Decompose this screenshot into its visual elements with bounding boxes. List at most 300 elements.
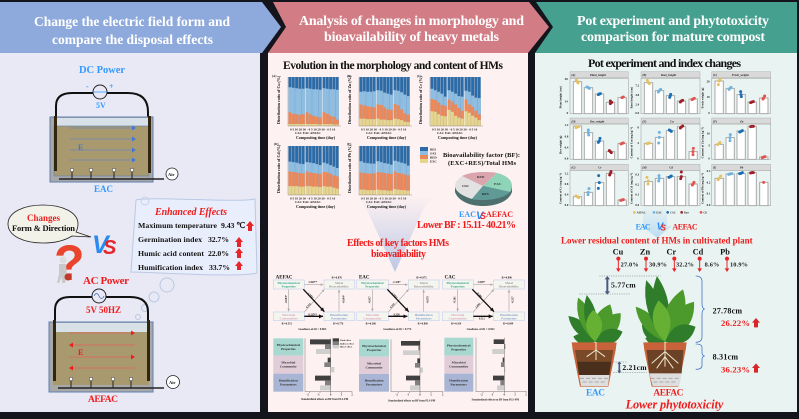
- effects chart: CAC: Microbial: [452, 361, 466, 365]
- comparison: EAC vs AEFAC: V: [657, 221, 665, 232]
- legend: treatments: EAC: [656, 211, 662, 214]
- effects chart: EAC: Physicochemical: [362, 344, 386, 348]
- AC reactor diagram: E: [78, 348, 83, 357]
- path diagram: CAC: -0.537: [512, 296, 515, 303]
- path diagram: CAC: Properties: [451, 285, 465, 289]
- path diagram: EAC: 0.561: [390, 302, 396, 309]
- small chart: dry weight: (D): [571, 119, 575, 123]
- effects chart: CAC: Standardized effects on BF from PLS-PM: [472, 399, 519, 402]
- pie chart: fractions: [455, 172, 512, 206]
- effects chart: EAC: Microbial: [367, 361, 381, 365]
- path diagram: EAC: -1.320*: [392, 281, 401, 284]
- callout: changes speech bubble: Changes: [27, 213, 60, 223]
- small chart: dry weight: 0.0: [565, 157, 569, 161]
- chart C: Cr fractions: (C): [417, 74, 421, 78]
- path diagram: EAC: R²=0.875: [416, 277, 427, 280]
- chart D: Cd fractions: CAC EAC AEFAC: [295, 200, 321, 204]
- small chart: Pb: 0.0: [707, 203, 711, 207]
- stats: shoot and root gains: 8.31cm: [713, 352, 738, 361]
- AC reactor diagram: Air: [169, 380, 176, 385]
- path diagram: CAC: Humification: [500, 313, 518, 317]
- chart C: Cr fractions: Distribution ratio of Cr (%): [418, 76, 423, 124]
- small chart: fresh weight: 20: [707, 79, 710, 83]
- DC reactor diagram: EAC: [94, 184, 113, 194]
- effects chart: AEFAC: Properties: [281, 347, 296, 351]
- pie chart: fractions: EXC: [494, 182, 502, 186]
- small chart: dry weight: 0.4: [565, 146, 569, 150]
- chart D: Cd fractions: Composting time (day): [296, 204, 336, 209]
- effects chart: AEFAC: Community: [280, 365, 297, 369]
- effects chart: AEFAC: 2: [351, 394, 353, 397]
- small chart: Cd: 0.0: [635, 203, 640, 207]
- text: bioavailability factor: [443, 152, 520, 167]
- small chart: plant height: (A): [571, 73, 575, 77]
- pie chart: fractions: RES: [482, 192, 489, 196]
- path diagram: AEFAC: Properties: [282, 285, 296, 289]
- small chart: Zn: Content of Zn (mg kg⁻¹): [700, 127, 704, 158]
- callout: enhanced effects scroll: Germination index: [138, 235, 202, 244]
- path diagram: EAC: -0.879: [426, 296, 429, 303]
- header: electric field form: Change the electric field form and: [34, 14, 230, 29]
- small chart: Cr: [558, 164, 628, 207]
- path diagram: AEFAC: Goodness-of-fit = 0.863: [298, 327, 327, 331]
- path diagram: CAC: 0.112: [479, 317, 485, 320]
- chart D: Cd fractions: (D): [274, 142, 278, 146]
- chart A: Cu fractions: 0 5 10 20 30 · 0 5 10 20 30 · 0 5 10: [290, 128, 336, 132]
- small chart: fresh weight: Fresh_weight: [732, 73, 749, 77]
- effects chart: CAC: Properties: [451, 348, 467, 352]
- text: bioavailability factor: Bioavailability factor (BF):: [443, 152, 520, 159]
- small chart: Cd: 0.1: [635, 193, 640, 197]
- path diagram: AEFAC: Parameters: [331, 317, 348, 321]
- path diagram: CAC: Microbial: [451, 313, 464, 317]
- small chart: Zn: 5: [708, 144, 710, 148]
- heavy metal reductions: [613, 247, 748, 272]
- effects chart: CAC: Physicochemical: [447, 344, 470, 348]
- heading: lower residual content: Lower residual content of HMs in cultivated plant: [561, 235, 753, 245]
- small chart: Pb: 0.1: [707, 192, 711, 196]
- small chart: Cd: (H): [642, 166, 647, 170]
- small chart: dry weight: Dry weight (g): [558, 136, 562, 154]
- icon: VS: [92, 231, 117, 259]
- path diagram: CAC: 2.090*: [478, 281, 486, 284]
- chart D: Cd fractions: 0 5 10 20 30 · 0 5 10 20 30 · 0 5 10: [290, 196, 336, 200]
- small chart: Cr: 0.8: [565, 182, 569, 186]
- effects chart: CAC: Parameters: [450, 383, 468, 387]
- path diagram: CAC: CAC: [445, 275, 456, 280]
- effects chart: CAC: 0: [504, 394, 506, 397]
- small chart: Cd: Content of Cd (mg kg⁻¹): [630, 173, 634, 204]
- pie chart: fractions: OXI: [462, 184, 469, 188]
- small chart: Cr: (G): [571, 166, 575, 170]
- chart D: Cd fractions: Distribution ratio of Cd (%): [276, 144, 281, 193]
- text: bioavailability factor: (EXC+RES)/Total HMs: [448, 160, 516, 167]
- AC reactor diagram: AEFAC: [88, 395, 118, 405]
- panel: pot experiment: [535, 2, 797, 412]
- path diagram: CAC: -0.561: [454, 296, 457, 303]
- small chart: Cd: 0.2: [635, 183, 640, 187]
- path diagram: EAC: Physicochemical: [361, 281, 384, 285]
- effects chart: EAC: Community: [365, 365, 383, 369]
- path diagram: EAC: 1.293*: [391, 292, 398, 300]
- path diagram: EAC: -0.937: [368, 296, 371, 303]
- effects chart: EAC: Humification: [365, 379, 384, 383]
- small chart: Zn: 0: [708, 157, 710, 161]
- stats: shoot and root gains: [713, 306, 760, 375]
- small chart: root height: 4.8: [635, 93, 640, 97]
- dimension: 5.77cm: [579, 276, 661, 295]
- small chart: Zn: 10: [707, 131, 710, 135]
- comparison: EAC vs AEFAC: S: [661, 224, 667, 233]
- callout: enhanced effects scroll: 22.0%: [208, 249, 229, 258]
- path diagram: EAC: Metal: [420, 281, 428, 285]
- heading: pot experiment: Pot experiment and index changes: [588, 56, 741, 70]
- DC reactor diagram: Air: [168, 172, 174, 177]
- effects chart: AEFAC: -2: [307, 394, 310, 397]
- small chart: dry weight: 0.8: [565, 134, 569, 138]
- chart E: Pb fractions: [347, 142, 412, 209]
- heavy metal reductions: Pb: [720, 247, 730, 256]
- header: morphology: bioavailability of heavy metals: [324, 30, 500, 45]
- plant: EAC pot: [564, 294, 627, 387]
- path diagram: EAC: [357, 275, 439, 331]
- small chart: plant height: [558, 72, 628, 115]
- small chart: Pb: 0.2: [707, 180, 711, 184]
- comparison: EAC vs AEFAC: AEFAC: [486, 210, 513, 219]
- callout: enhanced effects scroll: Enhanced Effects: [154, 207, 227, 218]
- callout: enhanced effects scroll: 9.43 ℃: [221, 221, 245, 230]
- labels: pots: EAC: [586, 388, 605, 398]
- DC reactor diagram: +: [109, 82, 114, 91]
- callout: changes speech bubble: [8, 205, 91, 243]
- heavy metal reductions: Zn: [640, 247, 650, 256]
- heavy metal reductions: 32.2%: [676, 262, 694, 269]
- path diagram: AEFAC: Bioavailability: [329, 285, 349, 289]
- callout: enhanced effects scroll: Maximum temperature: [138, 221, 218, 230]
- small chart: Cd: 0.3: [635, 173, 640, 177]
- chart A: Cu fractions: Composting time (day): [296, 135, 336, 140]
- labels: pots: [586, 388, 684, 398]
- legend: treatments: [633, 211, 708, 214]
- effects chart: AEFAC: 1: [341, 394, 343, 397]
- effects chart: EAC: 1: [430, 394, 432, 397]
- small chart: dry weight: Dry_weight: [589, 119, 604, 123]
- effects chart: AEFAC: Humification: [279, 379, 298, 383]
- path diagram: EAC: R²=0.869: [418, 323, 429, 326]
- path diagrams and effect bars: [273, 275, 527, 402]
- path diagram: AEFAC: 8.135**: [308, 313, 318, 316]
- effects chart: CAC: 2: [525, 394, 527, 397]
- effects chart: EAC: [359, 339, 444, 402]
- effects chart: CAC: 1: [514, 394, 516, 397]
- small chart: plant height: Plant_height: [590, 73, 606, 77]
- heavy metal reductions: 27.0%: [621, 262, 639, 269]
- small chart: root height: 0.0: [635, 111, 640, 115]
- effects chart: AEFAC: Total effect: [340, 339, 351, 342]
- header: morphology: [268, 2, 549, 53]
- legend: treatments: CK: [703, 211, 708, 214]
- legend: fractions: [420, 147, 437, 164]
- callout: changes speech bubble: Form & Direction: [12, 223, 75, 233]
- small chart: Cr: Cr: [598, 166, 602, 170]
- small chart: Zn: Zn: [740, 119, 744, 123]
- effects chart: AEFAC: Direct effect: [340, 346, 352, 349]
- small chart: fresh weight: 10: [707, 95, 710, 99]
- effects chart: EAC: Parameters: [366, 383, 383, 387]
- chart B: Zn fractions: Distribution ratio of Zn (%): [347, 75, 352, 124]
- path diagram: AEFAC: Physicochemical: [278, 281, 300, 285]
- chart A: Cu fractions: (A): [272, 74, 276, 78]
- chart C: Cr fractions: CAC EAC AEFAC: [437, 131, 463, 135]
- comparison: EAC vs AEFAC: [459, 210, 513, 222]
- DC reactor diagram: -: [86, 82, 89, 91]
- effects chart: EAC: 2: [442, 394, 444, 397]
- small chart: Cu: 0: [637, 157, 639, 161]
- header: pot experiment: [535, 2, 797, 53]
- path diagram: AEFAC: 1.293*: [307, 292, 314, 300]
- chart E: Pb fractions: (E): [347, 142, 351, 146]
- legend: fractions: RES: [430, 148, 436, 152]
- legend: fractions: RED: [430, 156, 437, 160]
- labels: pots: AEFAC: [653, 388, 684, 398]
- small chart: Cr: 1.2: [565, 172, 569, 176]
- path diagram: EAC: Properties: [365, 285, 380, 289]
- small chart: fresh weight: (C): [713, 73, 717, 77]
- small chart: Cu: [630, 118, 700, 161]
- icon: question mark figure: ?: [54, 235, 85, 291]
- comparison: EAC vs AEFAC: EAC: [459, 210, 476, 219]
- heavy metal reductions: Cr: [666, 247, 676, 256]
- effects chart: CAC: Humification: [449, 379, 468, 383]
- panel: electric field form: [0, 2, 281, 412]
- effects chart: EAC: -2: [396, 394, 399, 397]
- path diagram: EAC: R²=0.560: [366, 323, 377, 326]
- legend: fractions: EXC: [430, 160, 437, 164]
- path diagram: CAC: Goodness-of-fit = 0.822: [467, 327, 495, 331]
- path diagram: CAC: 0.584: [476, 292, 483, 299]
- small chart: plant height: 0: [567, 111, 569, 115]
- thought bubbles: [136, 278, 174, 320]
- small chart: Pb: Content of Pb (mg kg⁻¹): [700, 173, 704, 204]
- DC reactor diagram: 5V: [96, 101, 106, 110]
- comparison: EAC vs AEFAC: S: [480, 211, 486, 221]
- effects chart: CAC: -1: [491, 394, 494, 397]
- header: electric field form: [0, 2, 281, 53]
- stats: shoot and root gains: 36.23%: [721, 365, 750, 375]
- effects chart: EAC: Standardized effects on BF from PLS-PM: [388, 399, 436, 402]
- path diagram: EAC: Microbial: [366, 313, 379, 317]
- small chart: root height: Root height (cm): [630, 87, 634, 108]
- header: pot experiment: Pot experiment and phytotoxicity: [577, 14, 769, 29]
- path diagram: EAC: Parameters: [416, 317, 432, 321]
- small chart: Pb: [700, 164, 771, 207]
- effects chart: CAC: [444, 338, 527, 402]
- label: AC Power: AC Power: [83, 275, 129, 287]
- path diagram: AEFAC: Metal: [335, 281, 343, 285]
- small chart: plant height: 14: [565, 100, 568, 104]
- dimension: 5.77cm: 5.77cm: [611, 281, 636, 290]
- small chart: Pb: (I): [713, 166, 716, 170]
- chart B: Zn fractions: 0 5 10 20 30 · 0 5 10 20 30 · 0 5 10: [361, 128, 407, 132]
- effects chart: AEFAC: Indirect effect: [340, 342, 354, 345]
- chart B: Zn fractions: CAC EAC AEFAC: [366, 131, 392, 135]
- heavy metal reductions: 8.6%: [705, 262, 719, 269]
- conclusion: lower phytotoxicity: Lower phytotoxicity: [625, 397, 724, 411]
- small chart: Cu: Content of Cu (mg kg⁻¹): [630, 127, 634, 158]
- small chart: plant height: Plant height (cm): [558, 86, 562, 108]
- small chart: fresh weight: Fresh weight (g): [700, 88, 704, 108]
- effects chart: AEFAC: 0: [330, 394, 332, 397]
- small chart: Cu: 4: [637, 141, 639, 145]
- path diagram: CAC: Physicochemical: [447, 281, 469, 285]
- chart B: Zn fractions: Composting time (day): [367, 135, 407, 140]
- path diagram: CAC: Bioavailability: [499, 285, 519, 289]
- callout: enhanced effects scroll: Humification index: [138, 263, 203, 272]
- header: pot experiment: comparison for mature compost: [581, 30, 765, 45]
- small chart: Cu: 8: [637, 126, 639, 130]
- header: electric field form: compare the disposal effects: [52, 32, 213, 47]
- chart A: Cu fractions: CAC EAC AEFAC: [295, 131, 321, 135]
- chart D: Cd fractions: [274, 142, 341, 209]
- chart B: Zn fractions: [347, 74, 412, 140]
- small chart: dry weight: [558, 118, 628, 161]
- legend: treatments: AEFAC: [637, 211, 646, 214]
- path diagram: CAC: Metal: [505, 281, 513, 285]
- heading: effects of key factors: bioavailability: [371, 249, 426, 260]
- chart C: Cr fractions: Composting time (day): [438, 135, 478, 140]
- path diagram: EAC: 0.358: [394, 313, 400, 316]
- header: morphology: Analysis of changes in morphology and: [299, 14, 524, 29]
- small chart: Pb: 0.3: [707, 169, 711, 173]
- stats: shoot and root gains: 26.22%: [721, 318, 750, 328]
- comparison: EAC vs AEFAC: AEFAC: [672, 222, 698, 231]
- path diagram: AEFAC: [273, 275, 354, 331]
- small chart: fresh weight: 0: [708, 111, 710, 115]
- path diagram: CAC: Parameters: [501, 317, 518, 321]
- path diagram: CAC: Communities: [449, 317, 467, 321]
- heavy metal reductions: 10.9%: [730, 262, 748, 269]
- comparison: EAC vs AEFAC: EAC: [636, 222, 651, 231]
- path diagram: AEFAC: R²=0.776: [333, 323, 344, 326]
- callout: lower BF: Lower BF : 15.11- 40.21%: [417, 220, 516, 231]
- path diagram: EAC: Communities: [363, 317, 382, 321]
- effects chart: AEFAC: -1: [317, 394, 320, 397]
- comparison: EAC vs AEFAC: [636, 221, 698, 233]
- effects chart: AEFAC: Standardized effects on BF from PLS-PM: [301, 398, 349, 401]
- callout: enhanced effects scroll: [131, 197, 257, 275]
- chart E: Pb fractions: CAC EAC AEFAC: [366, 200, 392, 204]
- small chart: Cd: Cd: [669, 166, 673, 170]
- effects chart: AEFAC: Physicochemical: [277, 343, 300, 347]
- small chart: root height: 7.2: [635, 84, 640, 88]
- small chart: fresh weight: [700, 72, 771, 115]
- heavy metal reductions: 30.9%: [649, 262, 667, 269]
- small chart: root height: [630, 72, 700, 115]
- small chart: Zn: (F): [713, 119, 717, 123]
- pie chart: fractions: RED: [477, 175, 485, 179]
- effects chart: AEFAC: Microbial: [281, 361, 295, 365]
- path diagram: AEFAC: Communities: [280, 317, 298, 321]
- path diagram: CAC: [442, 275, 524, 331]
- dimension: 2.21cm: 2.21cm: [622, 363, 647, 372]
- heading: effects of key factors: [347, 238, 449, 260]
- path diagram: EAC: Bioavailability: [414, 285, 434, 289]
- legend: treatments: Raw: [684, 211, 689, 214]
- effects chart: AEFAC: [273, 338, 354, 401]
- small chart: Cr: 0.4: [565, 192, 569, 196]
- path diagram: CAC: R²=0.896: [502, 277, 513, 280]
- small chart: Cr: 0.0: [565, 203, 569, 207]
- callout: enhanced effects scroll: Humic acid content: [138, 249, 204, 258]
- path diagram: AEFAC: AEFAC: [276, 275, 293, 280]
- path diagram: AEFAC: -0.894*: [285, 294, 288, 303]
- braces: shoot and root: [696, 276, 705, 369]
- DC reactor diagram: E: [78, 143, 83, 152]
- small chart: dry weight: 1.2: [565, 123, 569, 127]
- label: DC Power: DC Power: [79, 65, 125, 76]
- panel: morphology and bioavailability: [268, 2, 549, 412]
- chart A: Cu fractions: [272, 74, 341, 140]
- effects chart: AEFAC: Parameters: [280, 383, 297, 387]
- small chart: Cd: [630, 164, 700, 207]
- path diagram: AEFAC: Humification: [330, 313, 348, 317]
- stats: shoot and root gains: 27.78cm: [713, 306, 742, 315]
- callout: enhanced effects scroll: 33.7%: [209, 263, 230, 272]
- chart A: Cu fractions: Distribution ratio of Cu (%): [276, 75, 281, 124]
- small chart: Cu: (E): [642, 119, 646, 123]
- chart E: Pb fractions: 0 5 10 20 30 · 0 5 10 20 30 · 0 5 10: [361, 196, 407, 200]
- path diagram: EAC: Goodness-of-fit = 0.774: [383, 327, 412, 331]
- path diagram: AEFAC: -0.884*: [342, 294, 345, 303]
- path diagram: AEFAC: 0.542: [306, 302, 312, 309]
- small chart: plant height: 28: [565, 77, 568, 81]
- heading: effects of key factors: Effects of key factors HMs: [347, 238, 449, 249]
- path diagram: AEFAC: Microbial: [282, 313, 295, 317]
- path diagram: CAC: 1.096: [475, 302, 482, 309]
- small chart: Cu: Cu: [670, 119, 674, 123]
- path diagram: EAC: EAC: [359, 275, 370, 280]
- effects chart: EAC: 0: [419, 394, 421, 397]
- chart C: Cr fractions: 0 5 10 20 30 · 0 5 10 20 30 · 0 5 10: [432, 128, 478, 132]
- AC reactor diagram: 5V 50HZ: [86, 305, 121, 315]
- icon: VS: S: [103, 237, 117, 259]
- small chart: Pb: Pb: [740, 166, 744, 170]
- comparison: EAC vs AEFAC: V: [476, 210, 485, 222]
- path diagram: AEFAC: 1.564**: [308, 281, 318, 284]
- dimension: 2.21cm: [613, 361, 647, 373]
- small chart: Cr: Content of Cr (mg kg⁻¹): [558, 173, 562, 204]
- path diagram: AEFAC: R²=0.876: [332, 277, 343, 280]
- chart B: Zn fractions: (B): [347, 74, 351, 78]
- heading: evolution: Evolution in the morphology and content of HMs: [283, 60, 504, 72]
- path diagram: EAC: Humification: [415, 313, 433, 317]
- path diagram: AEFAC: R²=0.551: [282, 323, 293, 326]
- effects chart: CAC: -2: [480, 394, 483, 397]
- effects chart: CAC: Communities: [449, 365, 469, 369]
- heavy metal reductions: Cd: [693, 247, 704, 256]
- small chart: root height: (B): [642, 73, 646, 77]
- chart C: Cr fractions: [417, 74, 483, 140]
- chart E: Pb fractions: Distribution ratio of Pb (%): [347, 145, 352, 193]
- funnel arrow: [358, 196, 432, 272]
- legend: fractions: OXI: [430, 152, 437, 156]
- small chart: Zn: [700, 118, 771, 161]
- plant: AEFAC pot: [631, 275, 702, 387]
- effects chart: EAC: Properties: [367, 348, 382, 352]
- heavy metal reductions: Cu: [613, 247, 624, 256]
- icon: VS: V: [92, 231, 111, 259]
- AC reactor diagram: [49, 289, 180, 405]
